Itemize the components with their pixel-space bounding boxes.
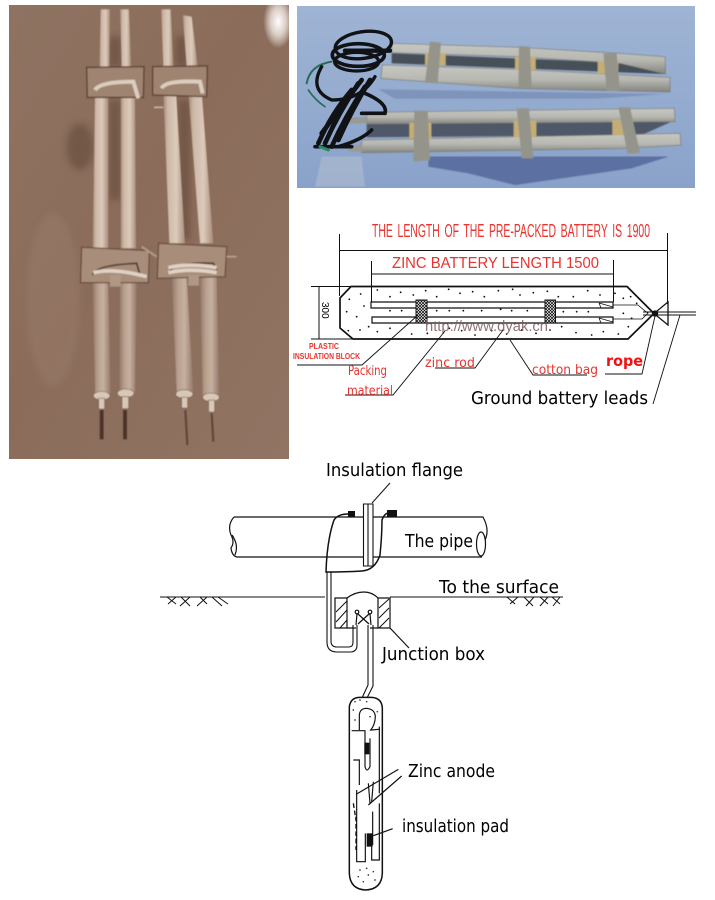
upper bar assembly bbox=[381, 42, 670, 92]
lower bar assembly bbox=[348, 107, 681, 162]
label: plastic insulation block: INSULATION BLOCK bbox=[293, 351, 361, 361]
zinc rods bbox=[371, 302, 648, 323]
rod set: long middle rods bbox=[93, 91, 213, 248]
label: to the surface: To the surface bbox=[438, 577, 559, 598]
clamp plates bbox=[81, 66, 237, 287]
heading: zinc battery length: ZINC BATTERY LENGTH 1500 bbox=[392, 255, 599, 272]
label: packing material: material bbox=[347, 384, 393, 399]
label: packing material: Packing bbox=[348, 364, 387, 379]
label: insulation flange: Insulation flange bbox=[326, 460, 463, 481]
insulation flange plate and bolts bbox=[348, 483, 397, 566]
label: plastic insulation block: PLASTIC bbox=[309, 341, 339, 351]
label: the pipe: The pipe bbox=[404, 531, 473, 552]
packing material dots bbox=[347, 289, 637, 335]
label: plastic insulation block bbox=[293, 341, 361, 361]
watermark: http://www.dyak.cn bbox=[425, 319, 548, 335]
label: rope: rope bbox=[606, 352, 643, 370]
label: junction box: Junction box bbox=[381, 644, 485, 665]
U-shaped cable tube bbox=[327, 572, 357, 652]
ground surface and hatching bbox=[160, 597, 563, 606]
rod set: upper rod ends bbox=[99, 9, 198, 67]
label: zinc anode: Zinc anode bbox=[408, 761, 495, 782]
rod set: lower rods bbox=[93, 275, 219, 397]
label: zinc rod: zinc rod bbox=[425, 356, 475, 371]
diagram: pre-packed battery section drawing bbox=[293, 221, 696, 409]
bond cable around flange bbox=[326, 513, 388, 572]
diagram: buried anode installation bbox=[160, 460, 563, 890]
zinc anode capsule bbox=[349, 697, 402, 890]
label: insulation pad: insulation pad bbox=[402, 816, 509, 837]
label: packing material bbox=[347, 364, 393, 399]
pipe bbox=[230, 517, 487, 557]
leader lines bbox=[297, 315, 680, 404]
anode lead wires bbox=[362, 625, 373, 698]
label: cotton bag: cotton bag bbox=[532, 363, 598, 378]
label: ground battery leads: Ground battery leads bbox=[471, 388, 648, 409]
photo: cast zinc anode rods on brown background bbox=[9, 0, 293, 459]
dimension lines bbox=[311, 233, 668, 339]
rod end collars and spikes bbox=[93, 389, 219, 445]
label: 300 dimension: 300 bbox=[319, 302, 330, 319]
junction box bbox=[335, 592, 409, 648]
cotton bag outline bbox=[340, 286, 654, 339]
plastic insulation blocks bbox=[416, 300, 556, 323]
photo: packaged zinc bars with cables on blue sheet bbox=[297, 6, 695, 188]
rope knot and leads bbox=[643, 302, 696, 325]
coiled black cables bbox=[307, 28, 393, 150]
